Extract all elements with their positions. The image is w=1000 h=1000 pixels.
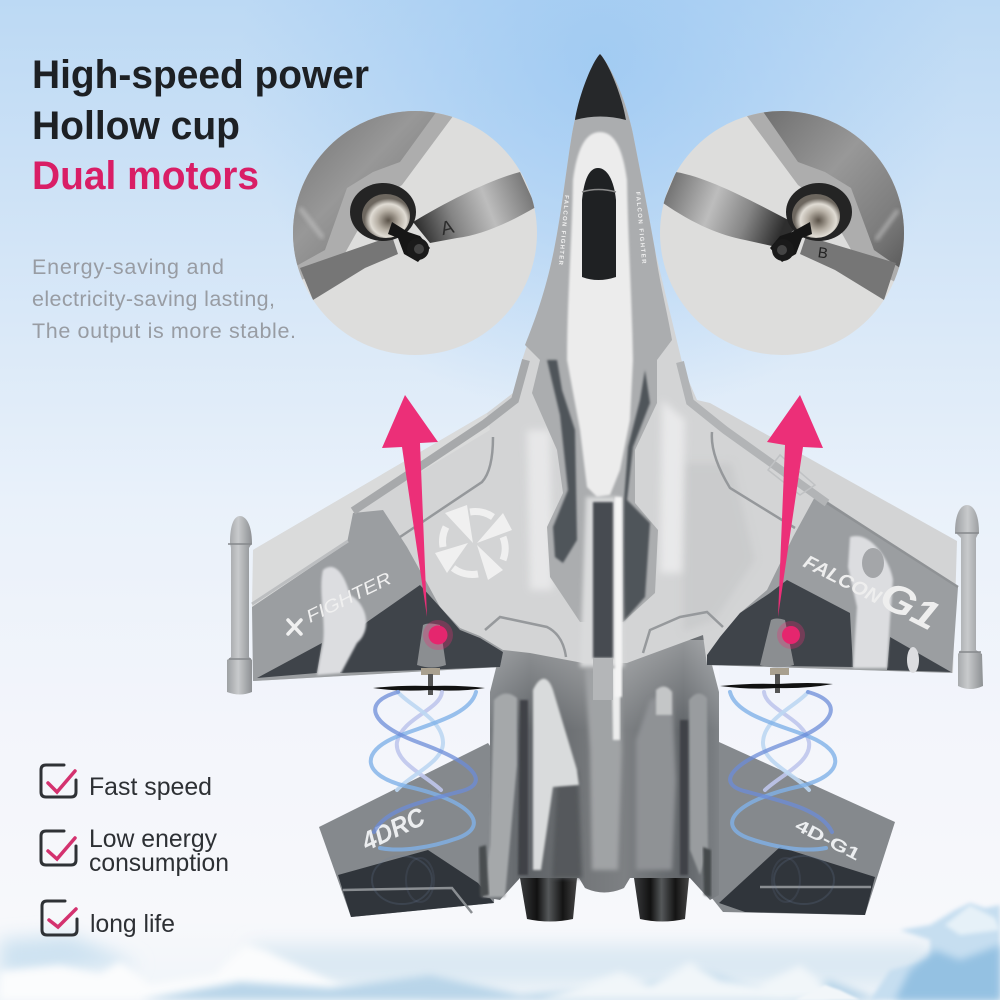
grey wing band [293, 111, 452, 280]
center highlight [585, 668, 622, 870]
panel outline [485, 617, 566, 657]
blade lower right [800, 236, 896, 300]
leading band [353, 360, 526, 511]
FIGHTER wing lettering: FIGHTER [303, 568, 394, 627]
checklist item: fast speed [41, 765, 212, 801]
light grey inner panel [683, 463, 755, 632]
panel line [400, 437, 493, 537]
wingtip missile right [955, 505, 983, 689]
motor marker dot left [423, 620, 453, 650]
fin right [689, 693, 708, 875]
blade lower left [300, 236, 398, 300]
FALCON G1 wing lettering: FALCON [800, 552, 885, 609]
fin left [482, 693, 517, 897]
blade upper right [413, 172, 536, 243]
dark underside [340, 585, 503, 673]
motor marker dot right [777, 621, 805, 649]
heading: High-speed power [32, 53, 369, 97]
centre column [580, 497, 624, 700]
description text: The output is more stable. [32, 319, 296, 343]
description text: Energy-saving and [32, 255, 224, 279]
FALCON G1 wing lettering [800, 552, 946, 639]
detail circle: motor A [293, 111, 537, 355]
detail circle: motor B [655, 100, 910, 358]
fuselage small print [557, 192, 646, 266]
canopy [582, 168, 616, 280]
heading [32, 53, 369, 198]
fuselage small print: FALCON FIGHTER [634, 192, 646, 265]
white camo stripe [317, 567, 366, 675]
nose cone [575, 54, 626, 120]
heading: Dual motors [32, 154, 259, 198]
leading band [680, 362, 827, 503]
dark underside [707, 580, 853, 667]
left wing camouflage [252, 360, 566, 681]
4DRC logo: 4DRC [356, 801, 430, 857]
motor pod and propeller right [720, 618, 833, 693]
motor housing [786, 183, 852, 241]
FALCON G1 wing lettering: G1 [873, 573, 946, 639]
checklist item: long life [42, 901, 175, 938]
4D-G1 logo: 4D-G1 [792, 816, 863, 864]
right dark stripe [623, 370, 650, 622]
arrow left [382, 395, 438, 617]
nozzles [520, 878, 689, 922]
light reflection on wing [876, 210, 898, 240]
hub [770, 222, 812, 262]
emblem on left wing [435, 505, 512, 580]
rear fuselage [479, 630, 719, 900]
right wing camouflage [643, 362, 958, 673]
motor housing [350, 183, 416, 241]
engine shading [552, 770, 582, 878]
right engine highlight [636, 690, 676, 870]
airflow helix right [730, 692, 835, 904]
mid grey [707, 493, 958, 673]
checklist item: low energy consumption: consumption [89, 849, 229, 877]
engine shadow lines [518, 700, 688, 875]
airflow helix left [371, 692, 476, 904]
FIGHTER wing lettering [288, 568, 394, 634]
clouds along the bottom [0, 903, 1000, 1000]
right tailplane [711, 742, 895, 915]
white wing streak [660, 400, 685, 573]
left dark stripe [547, 360, 577, 563]
left tailplane [319, 743, 500, 917]
description text [32, 255, 296, 343]
checklist item: low energy consumption [41, 825, 229, 877]
heading: Hollow cup [32, 104, 240, 148]
dark wing area [764, 111, 904, 268]
light reflection on wing [300, 208, 323, 238]
white wing streak [527, 430, 553, 590]
dark wing area [293, 111, 436, 266]
wingtip missile left [227, 516, 252, 694]
grey wing band [747, 111, 904, 282]
panel outline [643, 612, 723, 653]
checklist item: long life: long life [90, 910, 175, 938]
white highlight [533, 679, 579, 870]
white spine [567, 132, 633, 497]
canopy frame line [582, 190, 616, 192]
hub [388, 222, 430, 262]
fuselage small print: FALCON FIGHTER [557, 195, 569, 266]
letter B: B [817, 244, 829, 262]
fuselage side panels [525, 54, 672, 622]
leading edge light strip [252, 413, 490, 607]
mid grey [252, 510, 503, 681]
blade upper left [663, 172, 800, 246]
motor pod and propeller left [373, 624, 485, 695]
checklist item: low energy consumption: Low energy [89, 825, 217, 853]
arrow right [767, 395, 823, 617]
letter A: A [439, 217, 456, 240]
checklist item: fast speed: Fast speed [89, 773, 212, 801]
description text: electricity-saving lasting, [32, 287, 275, 311]
wings and forward fuselage silhouette [252, 54, 958, 700]
white camo stripe [848, 536, 893, 668]
